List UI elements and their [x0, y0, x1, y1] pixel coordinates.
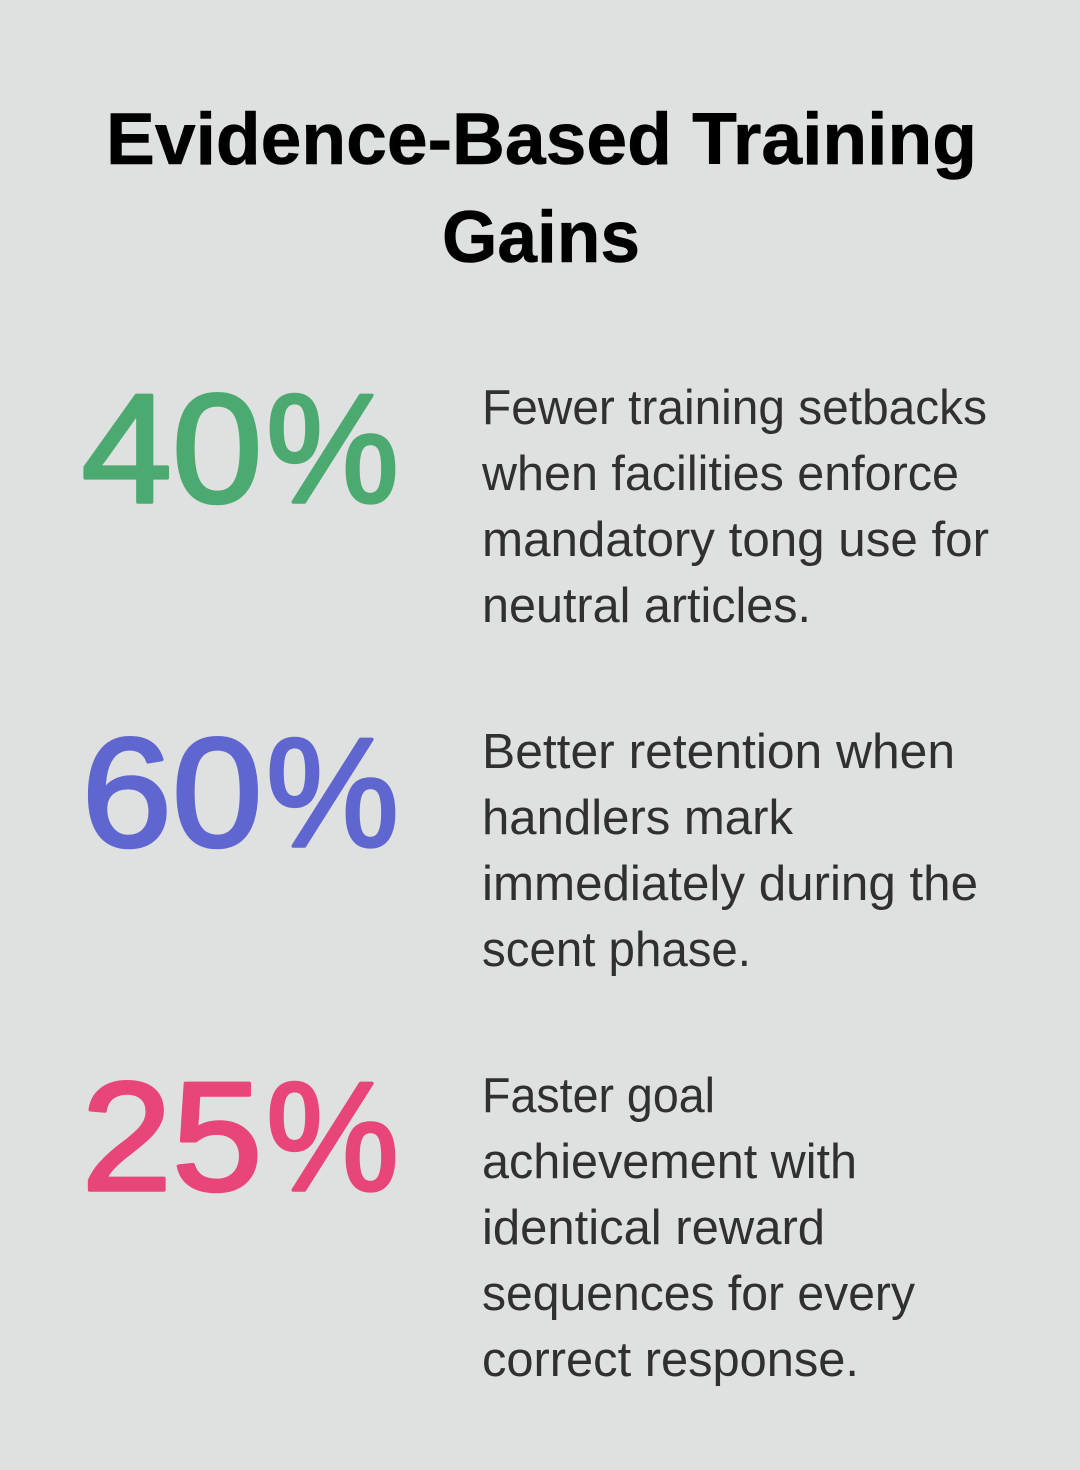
- text block: better retention: scent phase.: [482, 923, 751, 977]
- text block: fewer training setbacks: mandatory tong use for: [482, 513, 989, 567]
- number: 25%: %: [266, 1050, 399, 1223]
- number: 60%: %: [266, 706, 399, 879]
- text block: faster goal achievement: sequences for every: [482, 1267, 915, 1321]
- text block: fewer training setbacks: [481, 381, 989, 633]
- text block: faster goal achievement: identical reward: [482, 1201, 825, 1255]
- title: [106, 99, 977, 278]
- text block: fewer training setbacks: Fewer training setbacks: [482, 381, 987, 435]
- number: 40%: 40: [82, 362, 262, 535]
- text block: better retention: immediately during the: [482, 857, 978, 911]
- text block: fewer training setbacks: neutral articles.: [482, 579, 811, 633]
- number: 60%: 60: [82, 706, 262, 879]
- number: 40%: %: [266, 362, 399, 535]
- number: 40%: [82, 362, 399, 535]
- text block: better retention: Better retention when: [482, 725, 955, 779]
- number: 60%: [82, 706, 399, 879]
- text block: faster goal achievement: achievement with: [482, 1135, 857, 1189]
- text block: fewer training setbacks: when facilities enforce: [481, 447, 959, 501]
- number: 25%: 25: [82, 1050, 262, 1223]
- text block: faster goal achievement: [482, 1069, 915, 1387]
- text block: better retention: [482, 725, 978, 977]
- panel: stat 60%: [82, 706, 978, 977]
- text block: faster goal achievement: Faster goal: [482, 1069, 715, 1123]
- text block: better retention: handlers mark: [482, 791, 793, 845]
- number: 25%: [82, 1050, 399, 1223]
- title: Evidence-Based Training: [106, 99, 977, 180]
- panel: stat 25%: [82, 1050, 915, 1387]
- title: Gains: [442, 197, 640, 278]
- panel: stat 40%: [82, 362, 989, 633]
- text block: faster goal achievement: correct response.: [482, 1333, 859, 1387]
